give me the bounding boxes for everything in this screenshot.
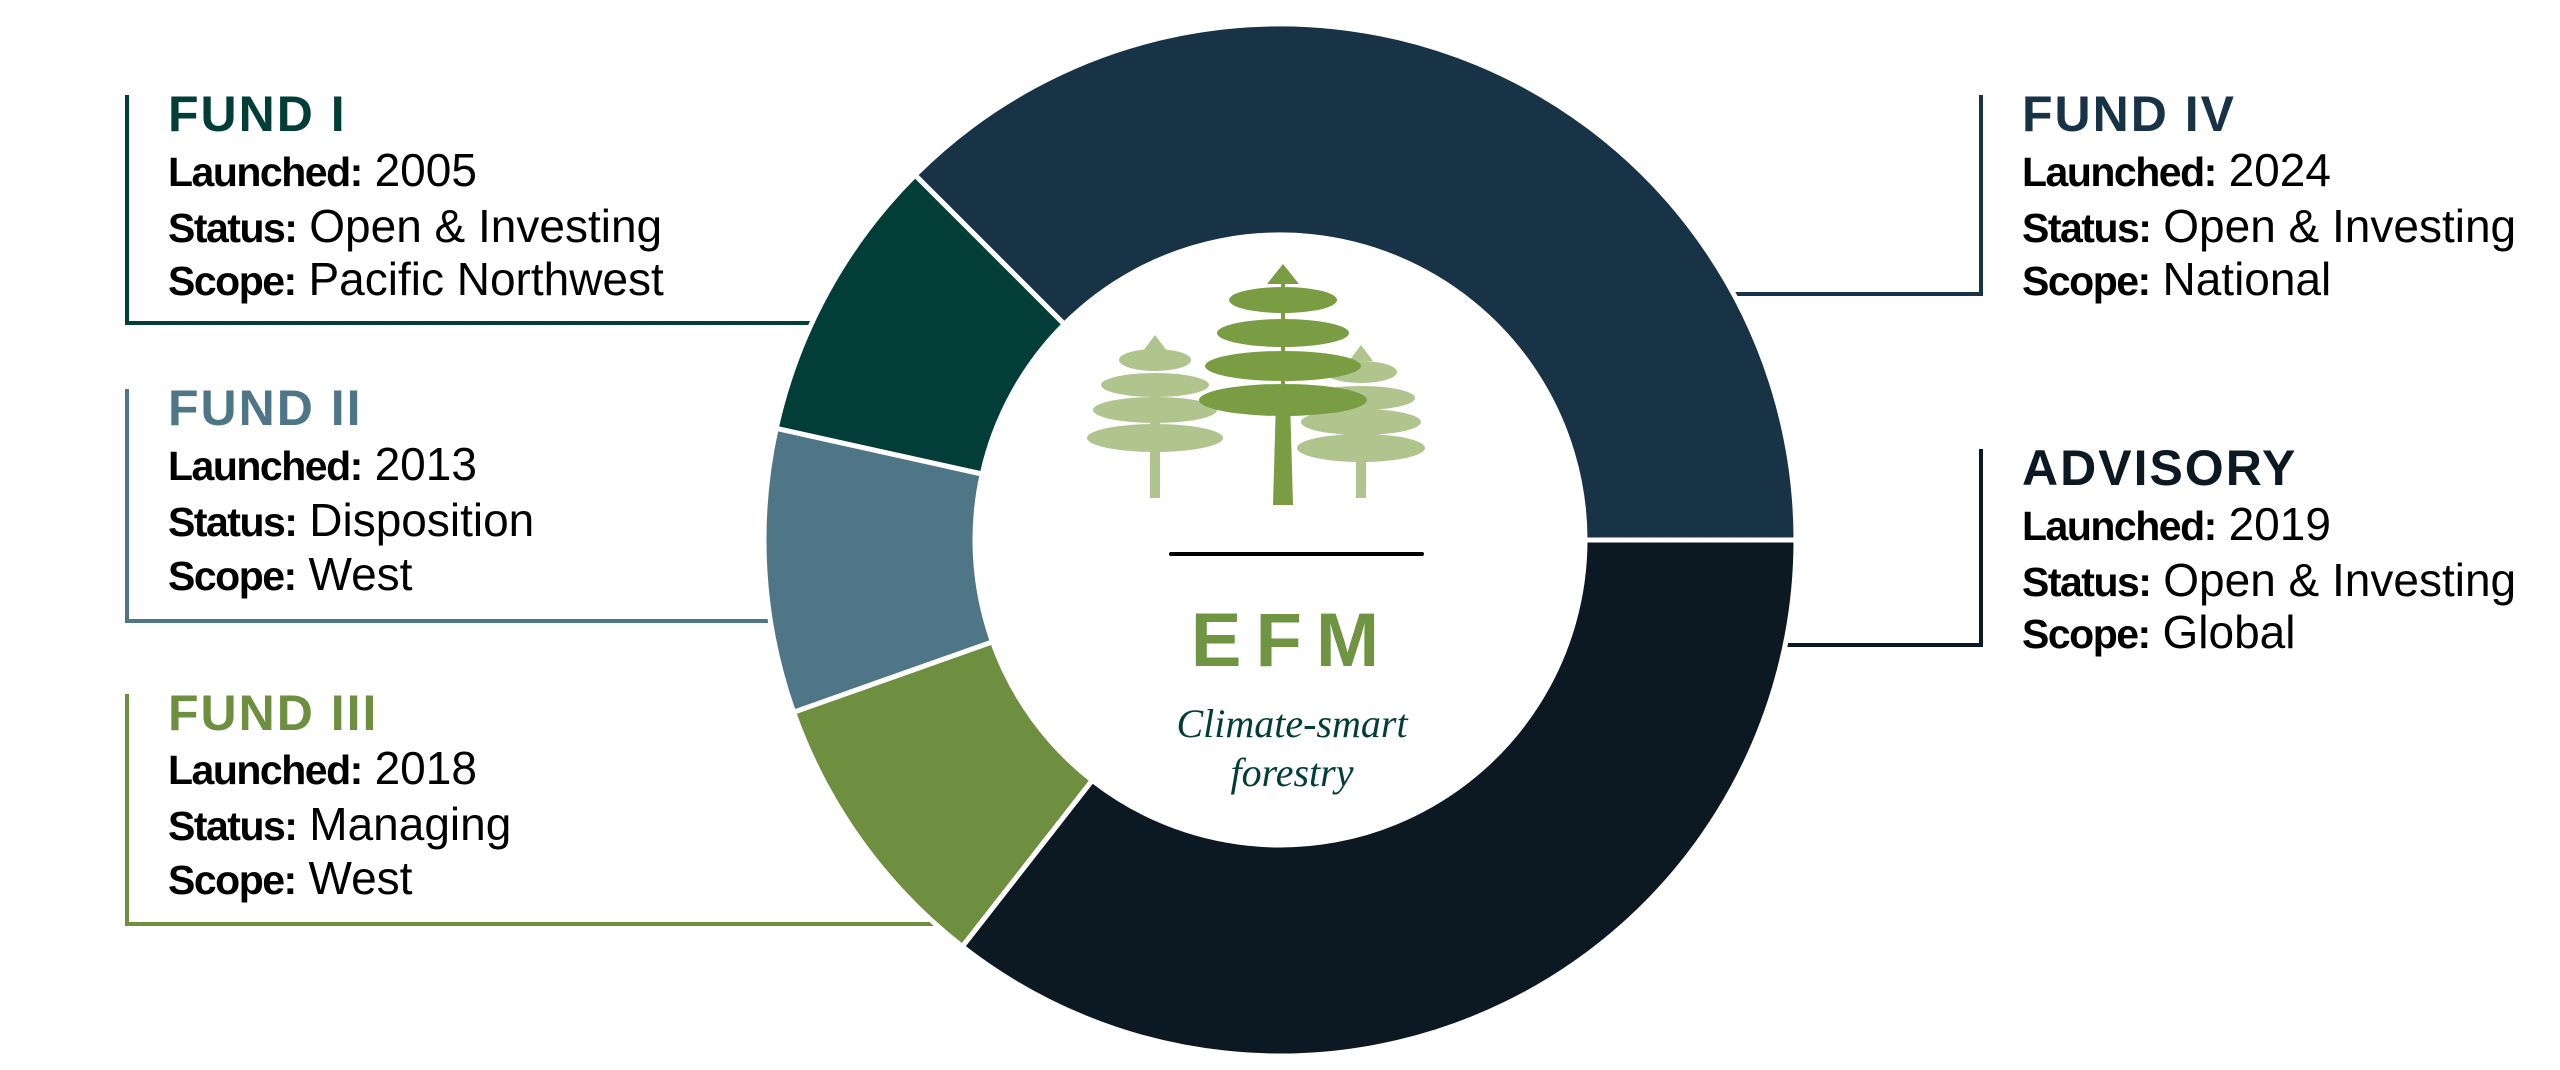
connector: fund I <box>127 95 820 323</box>
segment: fund III <box>794 642 1092 947</box>
logo divider line <box>1171 552 1422 556</box>
text block: fund I <box>168 86 664 305</box>
segment: fund IV <box>915 24 1796 540</box>
donut chart <box>764 24 1796 1056</box>
text block: fund III: Status: Managing <box>168 798 511 850</box>
text block: fund II: Status: Disposition <box>168 494 534 546</box>
text block: fund IV <box>2022 86 2516 305</box>
text block: fund II: Scope: West <box>168 548 413 600</box>
text block: advisory: Scope: Global <box>2022 606 2295 658</box>
text block: fund III: FUND III <box>168 685 378 741</box>
text block: fund II: Launched: 2013 <box>168 438 477 490</box>
text block: advisory: ADVISORY <box>2022 440 2297 496</box>
text block: fund II <box>168 380 534 600</box>
text block: fund III <box>168 685 511 904</box>
segment: fund II <box>764 428 992 712</box>
text block: fund IV: Launched: 2024 <box>2022 144 2331 196</box>
logo tagline: Climate-smart <box>1176 701 1408 746</box>
logo: trees <box>1087 264 1425 505</box>
right tree <box>1297 345 1425 498</box>
text block: fund III: Scope: West <box>168 852 413 904</box>
text block: fund IV: FUND IV <box>2022 86 2236 142</box>
text block: fund I: Status: Open & Investing <box>168 200 662 252</box>
connector: fund III <box>127 694 960 924</box>
center tree <box>1199 264 1367 505</box>
text block: fund III: Launched: 2018 <box>168 742 477 794</box>
logo tagline <box>1176 701 1408 795</box>
text block: fund I: Scope: Pacific Northwest <box>168 253 664 305</box>
connector: fund II <box>127 389 790 621</box>
logo wordmark EFM: EFM <box>1191 598 1393 683</box>
connector: advisory <box>1770 449 1981 645</box>
left tree <box>1087 335 1223 498</box>
text block: fund I: Launched: 2005 <box>168 144 477 196</box>
connector: fund IV <box>1720 95 1981 294</box>
text block: advisory <box>2022 440 2516 658</box>
segment: advisory <box>962 540 1796 1056</box>
logo tagline: forestry <box>1231 750 1354 795</box>
segment: fund I <box>776 175 1064 474</box>
text block: fund II: FUND II <box>168 380 363 436</box>
text block: fund IV: Status: Open & Investing <box>2022 200 2516 252</box>
text block: advisory: Launched: 2019 <box>2022 498 2331 550</box>
text block: fund IV: Scope: National <box>2022 253 2331 305</box>
text block: fund I: FUND I <box>168 86 347 142</box>
text block: advisory: Status: Open & Investing <box>2022 554 2516 606</box>
